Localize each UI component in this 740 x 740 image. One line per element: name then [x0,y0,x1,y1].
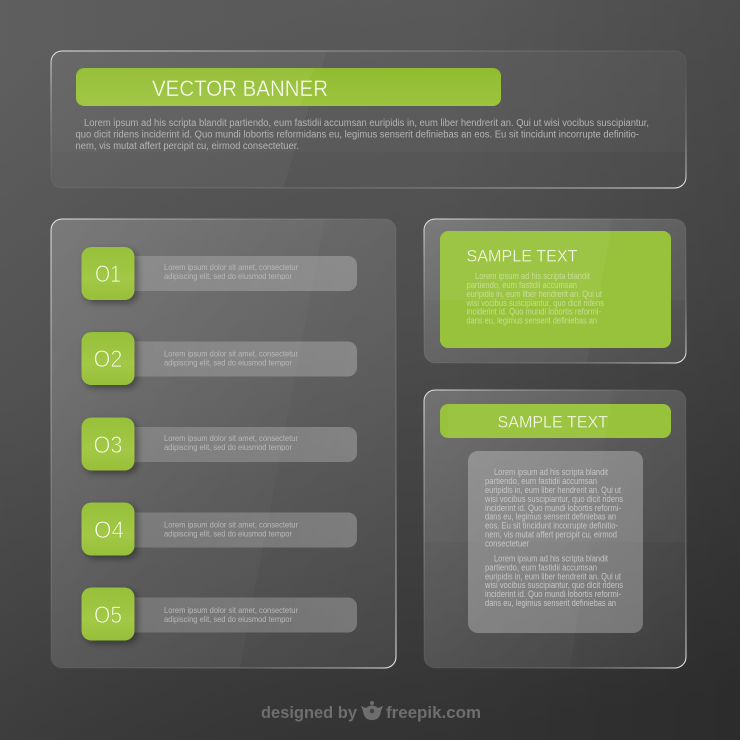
heading bar: SAMPLE TEXT [498,412,608,432]
paragraph two: inciderint id. Quo mundi lobortis reformi- [485,589,621,599]
paragraph one: wisi vocibus suscipiantur, quo dicit ridens [484,494,624,504]
panel: text card [424,390,686,668]
card heading: SAMPLE TEXT [466,246,578,266]
footer credit: designed by [261,703,358,722]
paragraph two: Lorem ipsum ad his scripta blandit [494,554,608,564]
paragraph one: eos. Eu sit tincidunt incorrupte definitio- [485,520,618,530]
list item 03 [82,418,357,470]
footer credit: freepik.com [386,703,481,722]
banner title bar: VECTOR BANNER [152,76,328,101]
list item 02: O2 [94,346,122,373]
list item 05: adipiscing elit, sed do eiusmod tempor [164,614,292,624]
paragraph one: consectetuer [485,538,529,548]
list item 03: adipiscing elit, sed do eiusmod tempor [164,442,292,452]
list item 01 [82,247,357,300]
card text: euripidis in, eum liber hendrerit an. Qui ut [466,289,602,299]
list item 01: O1 [95,261,121,288]
paragraph one: Lorem ipsum ad his scripta blandit [494,467,608,477]
paragraph one: inciderint id. Quo mundi lobortis reformi- [485,503,621,513]
banner body text [76,118,649,152]
card text: dans eu, legimus senserit definiebas an [466,316,597,326]
green card [440,231,671,348]
list item 04: adipiscing elit, sed do eiusmod tempor [164,528,292,538]
paragraph one: euripidis in, eum liber hendrerit an. Qui ut [485,485,621,495]
list item 04: O4 [94,517,124,544]
panel: green sample card [424,219,686,363]
heading bar [440,404,671,438]
list item 05 [82,588,357,640]
list item 02 [82,332,357,385]
list item 05: O5 [94,602,122,629]
icon: freepik mascot [361,701,383,720]
paragraph two [484,554,624,608]
list item 01: Lorem ipsum dolor sit amet, consectetur [164,262,298,272]
paragraph one [484,467,624,548]
card text: wisi vocibus suscipiantur, quo dicit ridens [466,298,605,308]
list item 02: Lorem ipsum dolor sit amet, consectetur [164,348,298,358]
banner body text: Lorem ipsum ad his scripta blandit partiendo, eum fastidii accumsan euripidis in, eum liber hendrerit an. Qui ut wisi vocibus suscipiantur, [84,118,649,129]
list item 04: Lorem ipsum dolor sit amet, consectetur [164,520,298,530]
list item 04 [82,502,357,556]
card text [466,271,605,326]
card text: Lorem ipsum ad his scripta blandit [475,271,590,281]
list item 01: adipiscing elit, sed do eiusmod tempor [164,271,292,281]
paragraph one: dans eu, legimus senserit definiebas an [485,512,616,522]
paragraph one: partiendo, eum fastidii accumsan [485,476,597,486]
banner body text: quo dicit ridens inciderint id. Quo mundi lobortis reformidans eu, legimus senserit definiebas an eos. Eu sit tincidunt incorrupte definitio- [76,130,639,140]
list item 03: O3 [94,432,122,459]
list item 05: Lorem ipsum dolor sit amet, consectetur [164,605,298,615]
paragraph two: partiendo, eum fastidii accumsan [485,562,597,572]
panel: vector banner [51,51,686,188]
banner body text: nem, vis mutat affert percipit cu, eirmod consectetuer. [76,141,299,152]
paragraph one: nem, vis mutat affert percipit cu, eirmod [485,530,617,540]
list item 02: adipiscing elit, sed do eiusmod tempor [164,358,292,368]
paragraph two: euripidis in, eum liber hendrerit an. Qui ut [485,572,621,582]
footer credit [261,701,481,722]
panel: numbered list [51,219,396,668]
card text: inciderint id. Quo mundi lobortis reformi- [466,306,601,316]
grey text box [468,451,643,633]
paragraph two: wisi vocibus suscipiantur, quo dicit ridens [484,580,624,590]
list item 03: Lorem ipsum dolor sit amet, consectetur [164,433,298,443]
paragraph two: dans eu, legimus senserit definiebas an [485,598,616,608]
card text: partiendo, eum fastidii accumsan [466,280,577,290]
banner title bar [76,68,501,106]
